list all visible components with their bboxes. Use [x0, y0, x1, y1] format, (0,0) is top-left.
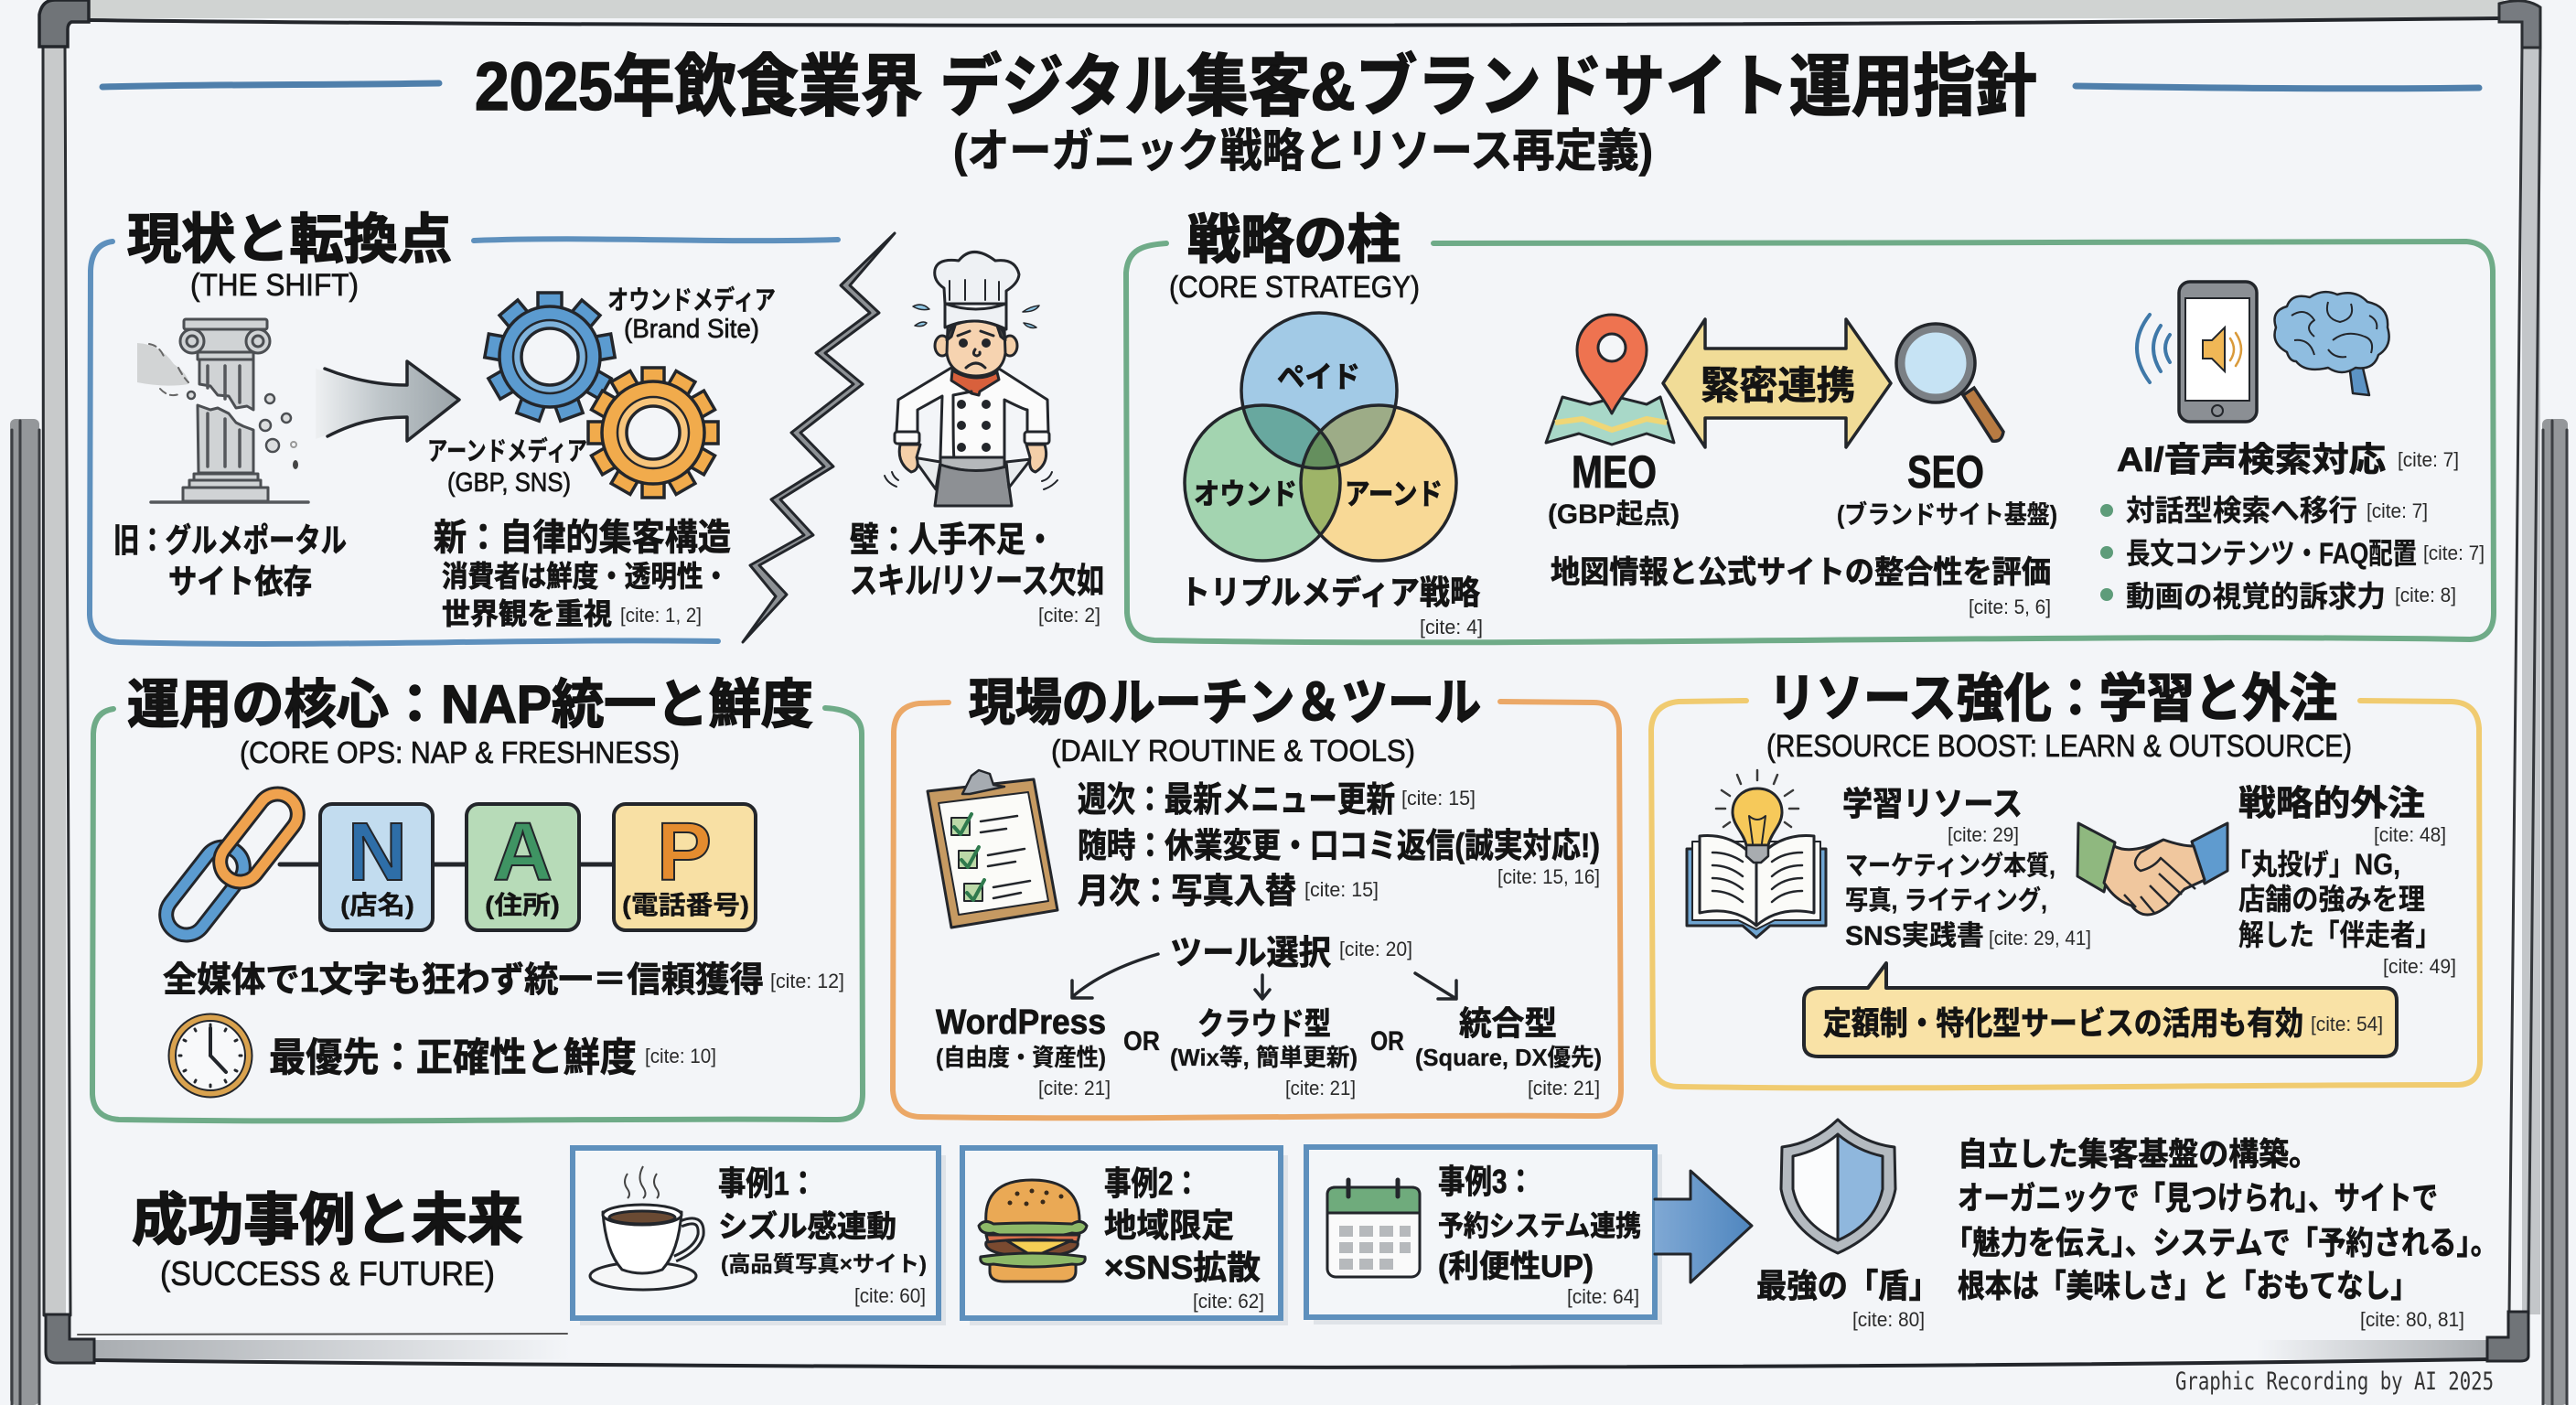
text: case 1: 事例1： [718, 1164, 817, 1202]
text: old model: サイト依存 [168, 563, 312, 600]
text: strategic outsourcing: 戦略的外注 [2238, 785, 2425, 823]
text: strategic outsourcing: 「丸投げ」NG, [2226, 848, 2400, 881]
text: case 3 [1438, 1163, 1641, 1308]
label: SEO: (ブランドサイト基盤) [1837, 499, 2057, 529]
arrow: close link [1663, 319, 1891, 447]
text: conclusion: オーガニックで「見つけられ」、サイトで [1958, 1181, 2438, 1217]
text: case 3: 事例3： [1438, 1163, 1534, 1200]
text: routines: [cite: 15] [1401, 787, 1476, 810]
text: the wall: 壁：人手不足・ [850, 521, 1055, 560]
subheading: resource boost: (RESOURCE BOOST: LEARN & OUTSOURCE) [1766, 729, 2352, 764]
case 3 [1306, 1147, 1662, 1325]
icon: lightning divider [743, 233, 895, 642]
option: integrated: (Square, DX優先) [1415, 1044, 1602, 1071]
subtitle: (オーガニック戦略とリソース再定義) [953, 125, 1653, 177]
label: owned media: オウンドメディア [607, 284, 776, 316]
text: consistency: 地図情報と公式サイトの整合性を評価 [1551, 555, 2051, 590]
callout: subscription services: 定額制・特化型サービスの活用も有効 [1823, 1006, 2303, 1042]
text: conclusion: [cite: 80, 81] [2360, 1308, 2464, 1331]
text: strategic outsourcing: [cite: 49] [2383, 955, 2456, 978]
icon: coffee [590, 1166, 701, 1290]
citation: [cite: 4] [1420, 616, 1483, 638]
text: old model [113, 521, 347, 600]
subheading: core strategy: (CORE STRATEGY) [1169, 270, 1420, 304]
arrow: to shield [1655, 1171, 1752, 1282]
card: P: (電話番号) [622, 891, 749, 919]
card: P: P [657, 807, 712, 898]
icon: worried chef [885, 252, 1057, 506]
option: cloud [1170, 1007, 1358, 1099]
text: new model: 世界観を重視 [442, 597, 612, 630]
text: case 3: 予約システム連携 [1438, 1210, 1641, 1242]
label: SEO: SEO [1907, 446, 1984, 498]
text: new model [434, 518, 731, 630]
heading: AI voice search: AI/音声検索対応 [2117, 441, 2386, 478]
icon: gears [485, 293, 718, 498]
card: N: (店名) [340, 891, 414, 919]
icon: burger [979, 1180, 1087, 1282]
icon: brain [2274, 292, 2389, 395]
text: case 1: [cite: 60] [854, 1284, 926, 1307]
text: case 3: (利便性UP) [1438, 1249, 1594, 1284]
label: MEO: MEO [1572, 446, 1657, 498]
icon: handshake [2077, 823, 2227, 915]
text: routines: 週次：最新メニュー更新 [1078, 781, 1395, 820]
icon: book and bulb [1687, 770, 1826, 938]
text: top priority: 最優先：正確性と鮮度 [269, 1036, 637, 1080]
citation: [cite: 10] [645, 1045, 716, 1067]
option: integrated: [cite: 21] [1528, 1077, 1600, 1099]
icon: magnifier [1896, 324, 2003, 441]
text: routines: 月次：写真入替 [1078, 873, 1296, 911]
text: strategic outsourcing [2226, 785, 2456, 978]
text: strategic outsourcing: 店舗の強みを理 [2238, 883, 2425, 916]
option: cloud: (Wix等, 簡単更新) [1170, 1044, 1358, 1071]
text: conclusion [1945, 1137, 2498, 1331]
label: earned media [427, 435, 587, 498]
heading: core ops: 運用の核心：NAP統一と鮮度 [127, 675, 813, 735]
heading: success and future: 成功事例と未来 [132, 1189, 523, 1252]
text: new model: 消費者は鮮度・透明性・ [442, 560, 729, 593]
label: strongest shield [1756, 1267, 1939, 1331]
label: owned media: (Brand Site) [624, 315, 759, 344]
callout: subscription services: [cite: 54] [2311, 1013, 2383, 1035]
text: learning resources: 写真, ライティング, [1845, 885, 2047, 916]
panel: resource boost [1651, 670, 2480, 1088]
option: cloud: [cite: 21] [1285, 1077, 1356, 1099]
venn diagram: triple media: ペイド [1277, 360, 1360, 393]
option: cloud: クラウド型 [1197, 1007, 1331, 1042]
text: the wall: スキル/リソース欠如 [850, 563, 1104, 601]
label: earned media: (GBP, SNS) [447, 468, 571, 498]
label: or: OR [1370, 1026, 1404, 1056]
citation: [cite: 20] [1339, 938, 1412, 960]
icon: chain link [158, 786, 306, 943]
title accent lines [102, 83, 2479, 89]
text: learning resources: SNS実践書 [1845, 921, 1984, 951]
venn diagram: triple media: オウンド [1194, 477, 1297, 510]
text: case 3: [cite: 64] [1567, 1285, 1639, 1308]
heading: daily routine: 現場のルーチン＆ツール [969, 674, 1481, 731]
text: learning resources: 学習リソース [1842, 785, 2023, 822]
text: case 2: 事例2： [1104, 1164, 1200, 1202]
text: the wall: [cite: 2] [1038, 604, 1100, 627]
bullet list: AI voice search: [cite: 7] [2423, 542, 2485, 564]
case 1 [573, 1148, 946, 1325]
icon: map pin [1546, 315, 1674, 445]
label: SEO [1837, 446, 2057, 529]
text: case 1: (高品質写真×サイト) [721, 1252, 927, 1277]
option: WordPress [936, 1003, 1111, 1099]
option: WordPress: WordPress [936, 1003, 1106, 1042]
card: N [320, 804, 433, 930]
text: case 2: ×SNS拡散 [1104, 1249, 1261, 1286]
panel: daily routine [893, 674, 1621, 1118]
subheading: core ops: (CORE OPS: NAP & FRESHNESS) [240, 735, 680, 769]
citation: [cite: 7] [2398, 448, 2459, 471]
text: old model: 旧：グルメポータル [113, 521, 347, 559]
venn diagram: triple media: アーンド [1345, 477, 1443, 510]
text: strategic outsourcing: [cite: 48] [2374, 823, 2446, 846]
heading: tool choice: ツール選択 [1170, 934, 1331, 971]
heading: resource boost: リソース強化：学習と外注 [1768, 670, 2337, 728]
text: routines: 随時：休業変更・口コミ返信(誠実対応!) [1078, 827, 1600, 864]
subheading: the shift: (THE SHIFT) [190, 268, 359, 303]
case 2 [962, 1148, 1288, 1325]
icon: calendar [1327, 1180, 1420, 1277]
text: case 1: シズル感連動 [718, 1209, 896, 1243]
icon: clipboard [928, 770, 1057, 928]
caption: triple media: トリプルメディア戦略 [1180, 574, 1480, 611]
text: learning resources: [cite: 29, 41] [1989, 927, 2091, 949]
text: conclusion: 「魅力を伝え」、システムで「予約される」。 [1945, 1226, 2498, 1261]
option: WordPress: (自由度・資産性) [936, 1044, 1106, 1071]
card: A [467, 804, 579, 930]
option: integrated: 統合型 [1459, 1004, 1557, 1042]
panel: core ops [92, 675, 863, 1121]
arrow: shift [316, 361, 459, 441]
text: new model: 新：自律的集客構造 [434, 518, 731, 558]
arrows: tool choice [1072, 954, 1456, 999]
label: strongest shield: 最強の「盾」 [1756, 1267, 1939, 1304]
text: routines: [cite: 15] [1304, 878, 1379, 901]
option: integrated [1415, 1004, 1602, 1099]
icon: crumbling pillar [137, 319, 308, 502]
card: A: A [493, 807, 553, 898]
text: the wall [850, 521, 1104, 627]
callout: subscription services [1804, 963, 2397, 1056]
panel: core strategy [1126, 210, 2494, 642]
text: case 1 [718, 1164, 927, 1307]
text: learning resources [1842, 785, 2091, 951]
card: A: (住所) [485, 891, 560, 919]
citation: [cite: 5, 6] [1969, 595, 2051, 618]
label: owned media [607, 284, 776, 344]
citation: [cite: 12] [770, 970, 844, 992]
text: unify NAP: 全媒体で1文字も狂わず統一＝信頼獲得 [163, 961, 764, 1000]
card: P [614, 804, 756, 930]
heading: success and future: (SUCCESS & FUTURE) [160, 1255, 495, 1292]
panel: the shift [90, 209, 838, 644]
label: MEO [1548, 446, 1680, 530]
icon: clock [168, 1014, 252, 1098]
label: MEO: (GBP起点) [1548, 499, 1680, 530]
label: strongest shield: [cite: 80] [1852, 1308, 1925, 1331]
bullet list: AI voice search: 長文コンテンツ・FAQ配置 [2126, 537, 2417, 570]
text: routines: [cite: 15, 16] [1497, 865, 1600, 888]
title: 2025年飲食業界 デジタル集客&ブランドサイト運用指針 [475, 48, 2037, 124]
text: case 2: [cite: 62] [1193, 1290, 1264, 1313]
bullet list: AI voice search [2100, 494, 2485, 613]
bullet list: AI voice search: [cite: 8] [2395, 584, 2456, 606]
text: learning resources: [cite: 29] [1948, 823, 2019, 846]
bullet list: AI voice search: 対話型検索へ移行 [2126, 494, 2357, 527]
label: earned media: アーンドメディア [427, 435, 587, 467]
text: case 2: 地域限定 [1104, 1207, 1234, 1244]
icon: smartphone voice [2137, 282, 2257, 422]
icon: shield [1781, 1120, 1895, 1253]
text: conclusion: 自立した集客基盤の構築。 [1958, 1137, 2319, 1173]
heading: core strategy: 戦略の柱 [1187, 210, 1401, 270]
heading: the shift: 現状と転換点 [127, 209, 452, 270]
arrow label: 緊密連携 [1701, 364, 1855, 407]
text: case 2 [1104, 1164, 1264, 1313]
option: WordPress: [cite: 21] [1038, 1077, 1111, 1099]
subheading: daily routine: (DAILY ROUTINE & TOOLS) [1051, 734, 1415, 767]
bullet list: AI voice search: 動画の視覚的訴求力 [2126, 580, 2386, 613]
text: strategic outsourcing: 解した「伴走者」 [2238, 918, 2441, 951]
text: new model: [cite: 1, 2] [620, 604, 702, 627]
bullet list: AI voice search: [cite: 7] [2367, 499, 2428, 522]
card: N: N [348, 807, 407, 898]
label: or: OR [1123, 1026, 1160, 1056]
text: learning resources: マーケティング本質, [1845, 851, 2055, 881]
venn diagram: triple media [1185, 313, 1456, 561]
text: conclusion: 根本は「美味しさ」と「おもてなし」 [1958, 1269, 2418, 1304]
text: routines [1078, 781, 1600, 911]
heading: success and future [132, 1189, 523, 1292]
